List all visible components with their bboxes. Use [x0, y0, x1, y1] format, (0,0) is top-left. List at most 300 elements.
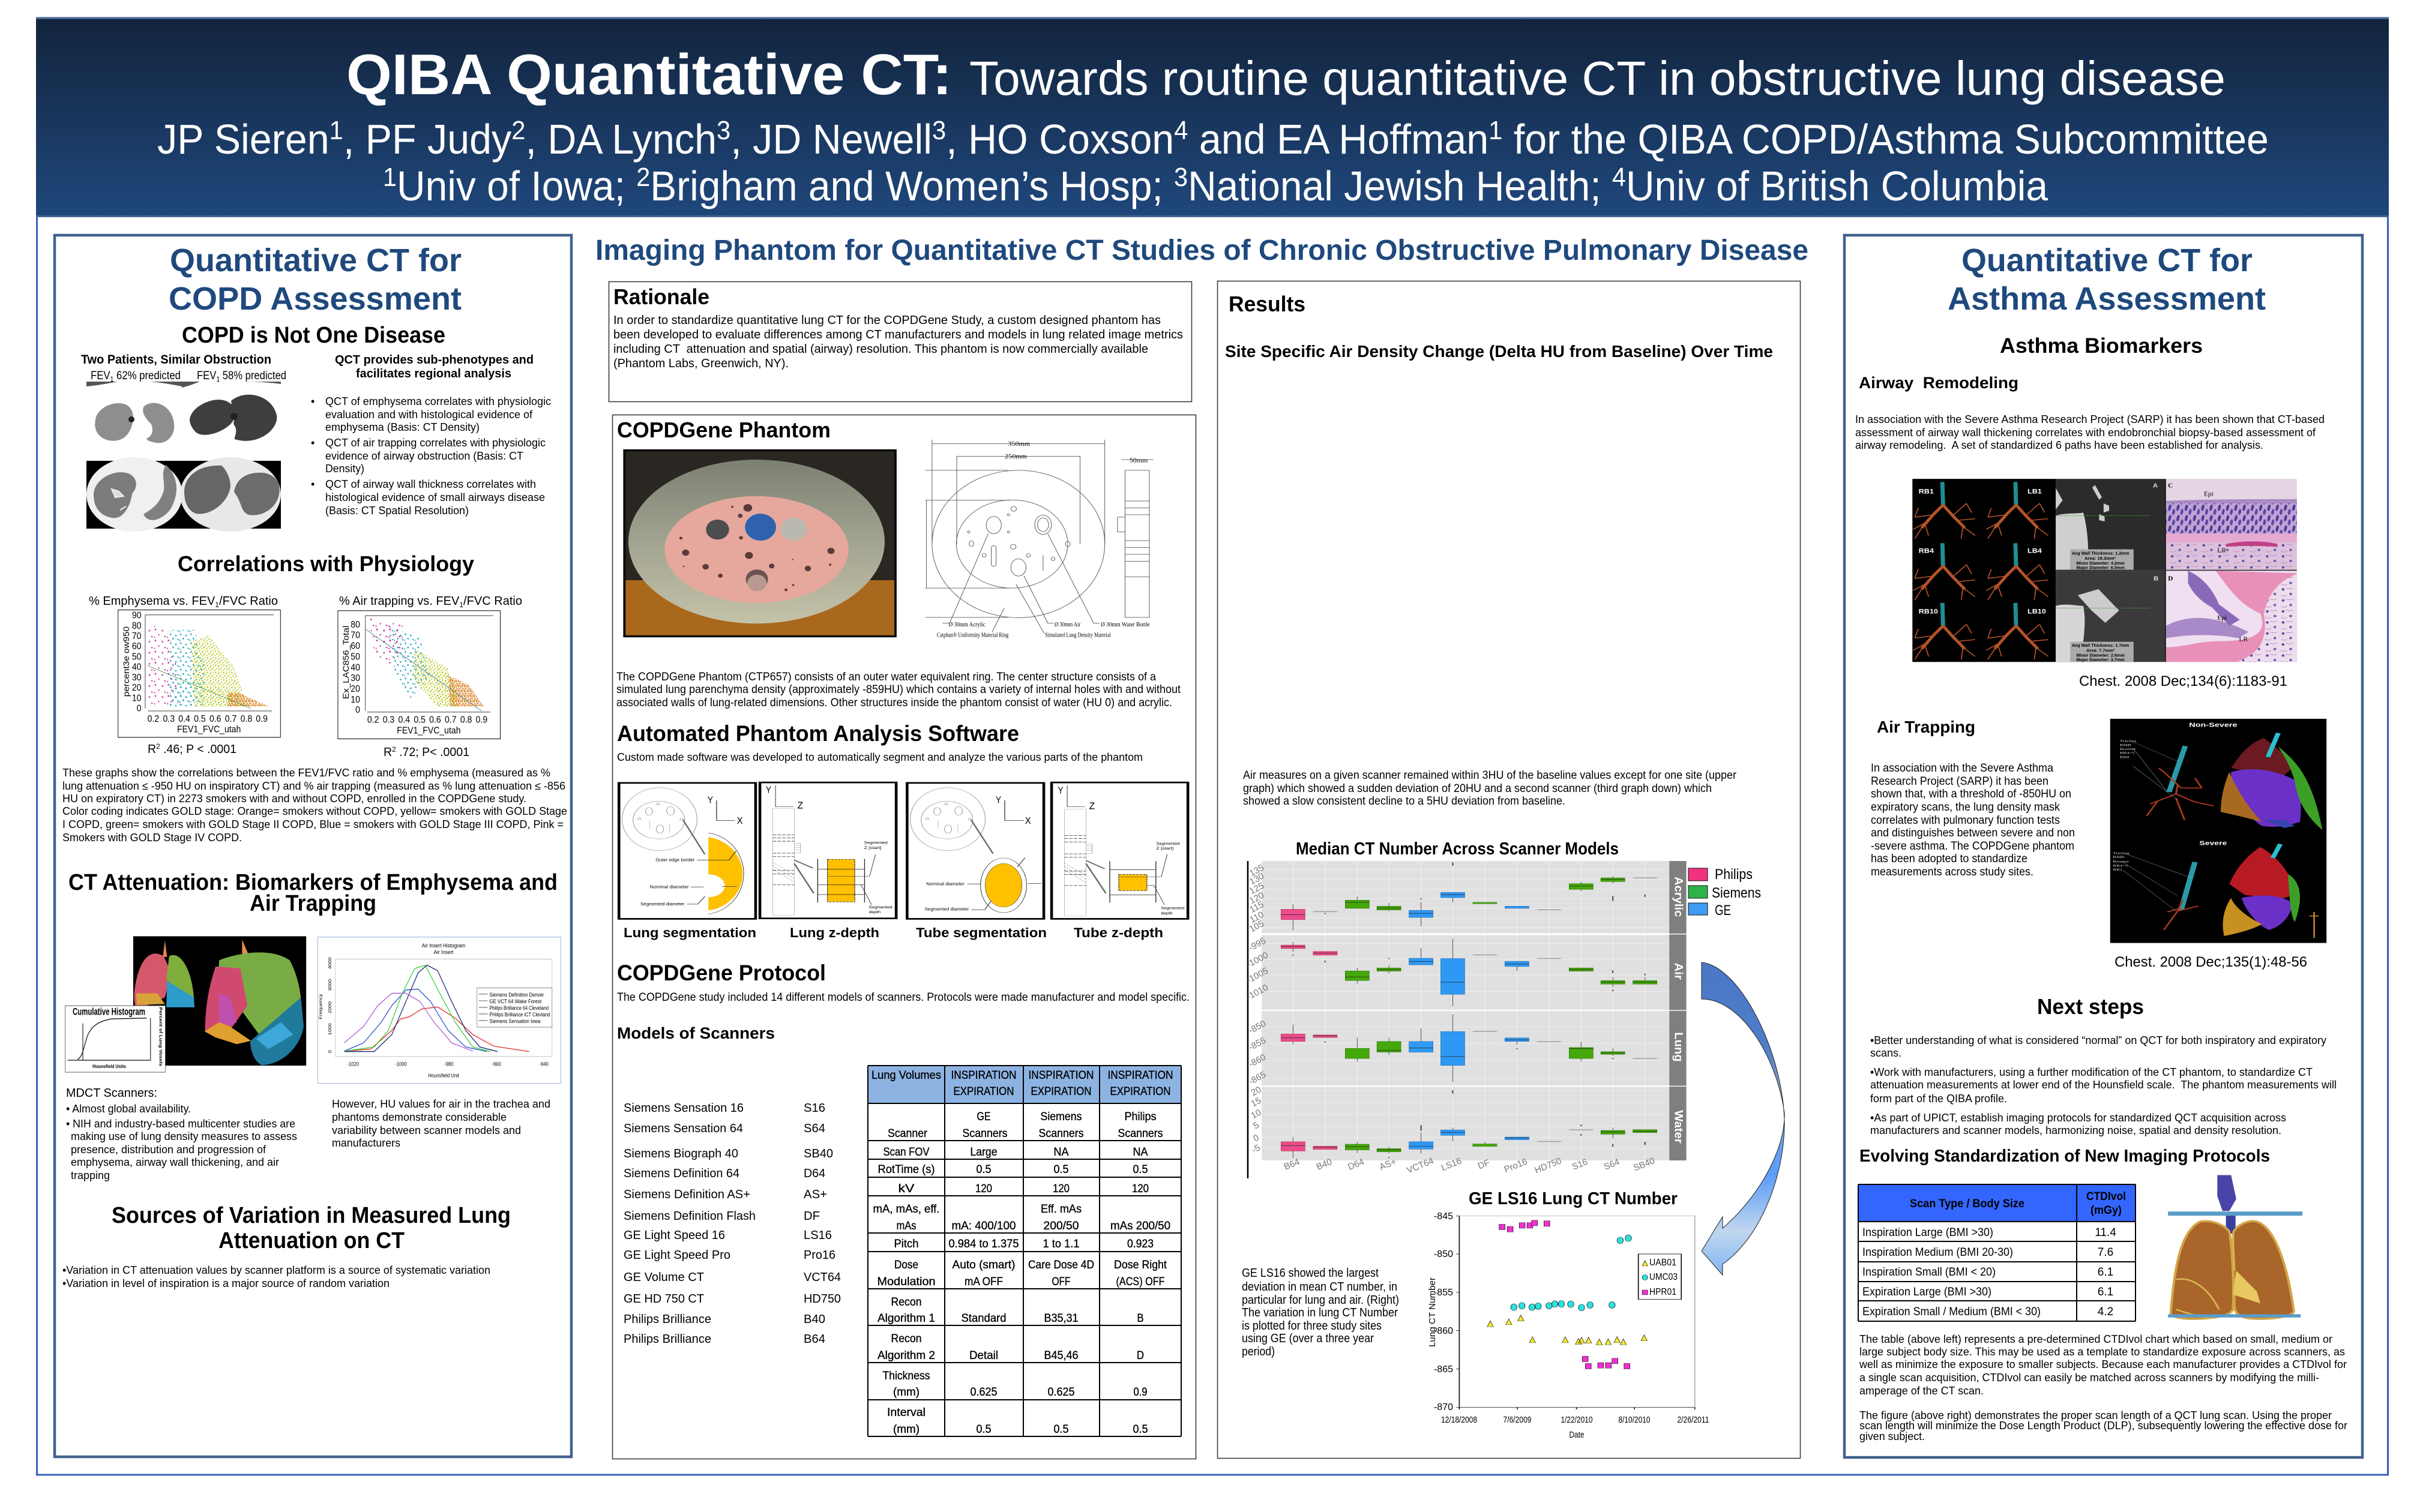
scatter chart: GE LS16 lung CT number: -850	[1434, 1249, 1453, 1259]
axis labels: box plot: -5	[1250, 1142, 1262, 1156]
subheading: site specific: Site Specific Air Density Change (Delta HU from Baseline) Over Time	[1225, 342, 1773, 361]
CT lung images	[86, 382, 281, 532]
diagram: phantom dimensions: 50mm	[1130, 457, 1148, 464]
text: software description: Custom made software was developed to automatically segment and analyze the various parts of the phantom	[617, 751, 1143, 763]
table: CTDIvol	[1858, 1184, 2136, 1321]
header band	[36, 17, 2389, 217]
stat: R2 .46: R	[148, 743, 156, 756]
table: protocol parameters: B45,46	[1044, 1349, 1078, 1362]
image labels: segmentation: Tube z-depth	[1074, 925, 1163, 940]
bullet list: QCT: •	[311, 395, 315, 407]
text: MDCT scanners: making use of lung density measures to assess	[71, 1130, 297, 1142]
authors: 2	[511, 116, 525, 145]
scatter chart: air trapping vs FEV1/FVC: 0.4	[399, 715, 410, 725]
image: airway trees, CT and histology: Minor Diameter: 2.6mm	[2077, 653, 2125, 658]
axis labels: box plot: 20	[1250, 1085, 1263, 1098]
axis labels: box plot: 135	[1248, 863, 1266, 878]
affiliations: 1	[383, 163, 397, 192]
text: air trapping: Research Project (SARP) it has been	[1871, 775, 2048, 788]
bullet list: QCT: evidence of airway obstruction (Basis: CT	[325, 450, 523, 462]
axis labels: box plot: D64	[1346, 1157, 1365, 1172]
scatter chart: GE LS16 lung CT number: Date	[1569, 1430, 1585, 1440]
diagram: phantom dimensions: Simulated Lung Density Material	[1045, 632, 1111, 638]
scatter chart: emphysema vs FEV1/FVC: 0.7	[225, 714, 236, 724]
text: next steps: attenuation measurements at lower end of the Hounsfield scale. The phantom measurements will	[1870, 1079, 2337, 1091]
table: protocol parameters: 0.984 to 1.375	[948, 1238, 1019, 1250]
image: airway trees, CT and histology	[1912, 479, 2297, 662]
legend: manufacturers	[1688, 866, 1761, 919]
diagram: lung segmentation	[619, 783, 756, 919]
whiskers	[1293, 876, 1645, 1158]
axis labels: box plot: -1010	[1245, 983, 1270, 1003]
image: lung scan length	[2168, 1175, 2302, 1319]
image: non-severe and severe lungs: Trachea	[2120, 739, 2137, 743]
image: airway trees, CT and histology: Major Diameter: 6.0mm	[2077, 565, 2125, 571]
table: CTDIvol: Scan Type / Body Size	[1910, 1198, 2024, 1210]
heading: Next steps: Next steps	[2037, 994, 2144, 1019]
table: protocol parameters: EXPIRATION	[1110, 1085, 1170, 1098]
text: table and figure notes: well as minimize the exposure to smaller subjects. Because each manufacturer provides a CTDIvol for	[1859, 1358, 2347, 1370]
table: CTDIvol: Inspiration Medium (BMI 20-30)	[1862, 1246, 2013, 1259]
text: GE LS16 description: period)	[1242, 1345, 1275, 1358]
diagram: lung z-depth: depth	[869, 910, 880, 914]
text: next steps: scans.	[1870, 1047, 1901, 1059]
axis labels: box plot: 120	[1248, 890, 1266, 906]
heading: Quantitative CT for COPD Assessment: COPD Assessment	[169, 281, 462, 317]
scatter chart: air trapping vs FEV1/FVC: Ex_LAC856_Total	[342, 626, 351, 699]
chart title: emphysema: 1	[215, 601, 219, 609]
diagram: lung z-depth: Y	[766, 785, 771, 795]
subheading: Air Trapping: Air Trapping	[1877, 718, 1975, 736]
heading: CT Attenuation: CT Attenuation: Biomarkers of Emphysema and	[68, 870, 558, 895]
axis labels: box plot: 15	[1250, 1096, 1263, 1109]
text: HU values variability: manufacturers	[332, 1137, 400, 1149]
text: air trapping: has been adopted to standardize	[1871, 853, 2027, 865]
table: protocol parameters: mAs 200/50	[1110, 1220, 1170, 1232]
list: scanner models: D64	[804, 1167, 825, 1180]
chart: air insert histogram: -940	[540, 1061, 549, 1067]
table: protocol parameters: 0.5	[1133, 1423, 1148, 1436]
table: protocol parameters: INSPIRATION	[1029, 1069, 1094, 1082]
box plot: median CT number by scanner: Water	[1672, 1110, 1685, 1144]
scatter chart: emphysema vs FEV1/FVC: 70	[132, 632, 141, 641]
scatter chart: air trapping vs FEV1/FVC: 10	[351, 695, 360, 705]
title: QIBA Quantitative CT:	[346, 43, 952, 107]
text: rationale body: been developed to evaluate differences among CT manufacturers and models in lung related image metrics	[613, 328, 1183, 341]
text: airway remodeling: In association with the Severe Asthma Research Project (SARP) it has been shown that CT-based	[1855, 413, 2325, 425]
bullet list: QCT: evaluation and with histological evidence of	[325, 409, 533, 421]
text: rationale body: In order to standardize quantitative lung CT for the COPDGene Study, a custom designed phantom has	[613, 314, 1161, 327]
image: airway trees, CT and histology: Area: 7.7mm²	[2086, 648, 2115, 653]
diagram: lung z-depth: Z	[798, 800, 803, 811]
axis labels: box plot: B64	[1283, 1157, 1301, 1172]
text: GE LS16 description: The variation in lung CT Number	[1242, 1306, 1398, 1319]
heading: COPD is Not One Disease: COPD is Not One Disease	[182, 323, 445, 348]
table: protocol parameters: Thickness	[882, 1370, 930, 1382]
bullet list: QCT: histological evidence of small airways disease	[325, 491, 545, 503]
text: rationale body	[613, 314, 1183, 370]
scatter chart: emphysema vs FEV1/FVC: 20	[132, 683, 141, 693]
text: MDCT scanners: • NIH and industry-based multicenter studies are	[66, 1118, 295, 1130]
heading: Quantitative CT for Asthma Assessment	[1948, 242, 2266, 317]
table: protocol parameters: Recon	[891, 1333, 922, 1345]
label: FEV1 62%: 1	[110, 375, 114, 383]
axis labels: box plot: 0	[1251, 1133, 1261, 1144]
heading: Sources of Variation: Sources of Variation in Measured Lung	[112, 1203, 511, 1228]
list: scanner models: S64	[804, 1122, 825, 1135]
label: FEV1 62%: FEV	[91, 370, 113, 382]
box plot: median CT number by scanner: Air	[1672, 963, 1685, 980]
label: FEV1 58%: 1	[216, 375, 220, 383]
scatter chart: emphysema vs FEV1/FVC: 0.3	[163, 714, 175, 724]
stat: R2 .46: 2	[156, 742, 160, 751]
list: scanner models: Siemens Definition Flash	[624, 1210, 756, 1223]
image: airway trees, CT and histology: B	[2154, 575, 2159, 582]
diagram: lung z-depth: Z [start]	[864, 845, 881, 850]
heading: Correlations with Physiology: Correlations with Physiology	[178, 551, 474, 576]
list: scanner models	[624, 1102, 841, 1346]
scatter chart: emphysema vs FEV1/FVC: 80	[132, 621, 141, 631]
text: phantom description	[616, 671, 1181, 709]
scatter chart: emphysema vs FEV1/FVC: 0.9	[256, 714, 268, 724]
legend: manufacturers: GE	[1715, 902, 1731, 919]
stat: R2 .72: 2	[392, 745, 396, 754]
table: protocol parameters: Modulation	[877, 1276, 935, 1288]
image labels: segmentation: Tube segmentation	[916, 925, 1047, 940]
text: table and figure notes	[1859, 1333, 2347, 1442]
text: MDCT scanners	[66, 1087, 297, 1181]
image: non-severe and severe lungs: Bronint	[2120, 748, 2136, 751]
scatter chart: GE LS16 lung CT number: UMC03	[1649, 1272, 1678, 1282]
diagram: tube segmentation: Y	[996, 795, 1001, 805]
chart: air insert histogram: 4000	[327, 957, 333, 969]
image: non-severe and severe lungs: Bronint	[2113, 860, 2129, 863]
image: non-severe and severe lungs: RMB	[2120, 743, 2131, 747]
scatter chart: air trapping vs FEV1/FVC: 0.9	[476, 715, 487, 725]
text: graph description: Smokers with GOLD Stage IV COPD.	[62, 832, 242, 844]
scatter chart: emphysema vs FEV1/FVC	[118, 610, 280, 737]
list: scanner models: LS16	[804, 1229, 832, 1242]
table: protocol parameters: 0.5	[976, 1163, 992, 1176]
bullet list: QCT: QCT of airway wall thickness correlates with	[325, 478, 536, 490]
text: next steps: •Work with manufacturers, using a further modification of the CT phantom, to standardize CT	[1870, 1066, 2313, 1078]
image: airway trees, CT and histology: Epi	[2217, 614, 2227, 622]
scatter chart: emphysema vs FEV1/FVC: 0	[137, 704, 141, 714]
scatter chart: air trapping vs FEV1/FVC: 0.8	[460, 715, 472, 725]
list: scanner models: SB40	[804, 1147, 833, 1160]
diagram: lung z-depth: Segmented	[864, 841, 888, 845]
chart: air insert histogram: -960	[492, 1061, 501, 1067]
scatter chart: air trapping vs FEV1/FVC	[338, 611, 501, 739]
diagram: tube z-depth: Z [start]	[1156, 846, 1173, 851]
affiliations: 3	[1174, 163, 1188, 192]
text: rationale body: (Phantom Labs, Greenwich, NY).	[613, 357, 789, 370]
list: scanner models: VCT64	[804, 1271, 841, 1284]
diagram: tube segmentation: Nominal diameter	[926, 882, 965, 887]
list: scanner models: Siemens Sensation 16	[624, 1102, 744, 1115]
table: protocol parameters: Philips	[1125, 1111, 1156, 1123]
table: protocol parameters: 1 to 1.1	[1043, 1238, 1079, 1250]
panel: results	[1217, 281, 1801, 1458]
table: protocol parameters: EXPIRATION	[1031, 1085, 1091, 1098]
scatter chart: air trapping vs FEV1/FVC: 0.5	[414, 715, 426, 725]
scatter chart: air trapping vs FEV1/FVC: FEV1_FVC_utah	[397, 726, 461, 736]
table: protocol parameters: 0.625	[1048, 1386, 1074, 1399]
list: scanner models: DF	[804, 1210, 820, 1223]
chart: air insert histogram: -980	[444, 1061, 454, 1067]
heading: Quantitative CT for Asthma Assessment: Quantitative CT for	[1961, 242, 2253, 278]
text: MDCT scanners: • Almost global availability.	[66, 1103, 191, 1115]
scatter chart: emphysema vs FEV1/FVC: 30	[132, 673, 141, 683]
authors: 4	[1174, 116, 1188, 145]
text: graph description: HU on expiratory CT) in 2273 smokers with and without COPD, enrolled in the COPDGene study.	[62, 793, 526, 805]
scatter chart: GE LS16 lung CT number: -855	[1434, 1288, 1453, 1298]
authors: , PF Judy	[343, 116, 511, 163]
table: protocol parameters: 120	[1053, 1183, 1070, 1195]
heading: Asthma Biomarkers: Asthma Biomarkers	[2000, 334, 2203, 358]
text: air measures	[1243, 769, 1737, 808]
table: protocol parameters: Standard	[962, 1312, 1006, 1325]
image: airway trees, CT and histology: Epi	[2204, 491, 2214, 498]
text: table and figure notes: scan length will minimize the Dose Length Product (DLP), subsequently lowering the effective dose for	[1859, 1420, 2347, 1432]
list: scanner models: Philips Brilliance	[624, 1313, 711, 1326]
scatter chart: air trapping vs FEV1/FVC: 0.7	[445, 715, 457, 725]
table: protocol parameters: 120	[1132, 1183, 1149, 1195]
text: QCT provides sub-phenotypes	[335, 353, 534, 380]
image: 3D lung lobes	[133, 936, 306, 1066]
text: air trapping	[1871, 762, 2075, 878]
text: HU values variability	[332, 1098, 550, 1149]
table: protocol parameters: B35,31	[1044, 1312, 1078, 1325]
authors: JP Sieren	[157, 116, 339, 163]
diagram: tube segmentation: X	[1025, 815, 1031, 826]
box plot: median CT number by scanner: Lung	[1672, 1032, 1685, 1062]
table: protocol parameters: INSPIRATION	[1108, 1069, 1173, 1082]
table: protocol parameters: NA	[1054, 1146, 1069, 1159]
table: protocol parameters: Recon	[891, 1296, 922, 1309]
text: MDCT scanners: emphysema, airway wall thickening, and air	[71, 1156, 279, 1168]
list: scanner models: GE Light Speed Pro	[624, 1249, 730, 1262]
text: phantom description: simulated lung parenchyma density (approximately -859HU) which contains a variety of internal holes with and without	[616, 683, 1181, 696]
inset: cumulative histogram: Percent of Lung Voxels	[158, 1007, 164, 1066]
authors: and EA Hoffman	[1188, 116, 1488, 163]
scatter chart: GE LS16 lung CT number: UAB01	[1649, 1258, 1676, 1268]
text: HU values variability: However, HU values for air in the trachea and	[332, 1098, 550, 1110]
chart: air insert histogram: Siemens Definition Denver	[489, 991, 544, 998]
table: protocol parameters: (mm)	[893, 1386, 920, 1399]
diagram: tube segmentation	[907, 783, 1044, 919]
heading: Automated Phantom Analysis Software: Automated Phantom Analysis Software	[617, 721, 1019, 746]
text: air measures: showed a slow consistent decline to a 5HU deviation from baseline.	[1243, 795, 1565, 808]
scatter chart: emphysema vs FEV1/FVC: 90	[132, 611, 141, 621]
scatter chart: air trapping vs FEV1/FVC: 0.3	[383, 715, 394, 725]
axis labels: box plot: -1000	[1245, 950, 1270, 970]
table: CTDIvol: 6.1	[2098, 1286, 2113, 1298]
scatter chart: GE LS16 lung CT number: Lung CT Number	[1427, 1277, 1437, 1347]
table: protocol parameters: kV	[898, 1183, 915, 1195]
text: GE LS16 description: using GE (over a three year	[1242, 1332, 1374, 1345]
image: airway trees, CT and histology: LR	[2239, 636, 2248, 643]
table: protocol parameters: Scan FOV	[883, 1146, 930, 1159]
table: protocol parameters: GE	[977, 1111, 990, 1123]
image: non-severe and severe lungs: RMB	[2113, 856, 2125, 859]
text: next steps: •As part of UPICT, establish imaging protocols for standardized QCT acquisition across	[1870, 1112, 2286, 1124]
box plot: median CT number by scanner: Acrylic	[1672, 877, 1685, 917]
table: protocol parameters: D	[1137, 1349, 1144, 1362]
table: protocol parameters: Scanners	[963, 1127, 1007, 1140]
scatter chart: air trapping vs FEV1/FVC: 0.6	[429, 715, 441, 725]
table: protocol parameters: 0.5	[1054, 1423, 1068, 1436]
diagram: tube z-depth: Z	[1089, 801, 1095, 811]
subheading: Airway Remodeling: Airway Remodeling	[1859, 374, 2018, 392]
scatter chart: emphysema vs FEV1/FVC: 0.6	[209, 714, 221, 724]
image: airway trees, CT and histology: RB4	[1919, 547, 1934, 554]
table: protocol parameters: Algorithm 1	[877, 1312, 935, 1325]
image: non-severe and severe lungs: Non-Severe	[2189, 721, 2238, 728]
text: GE LS16 description	[1242, 1267, 1399, 1358]
bullet list: QCT: •	[311, 437, 315, 449]
table: protocol parameters: 120	[975, 1183, 992, 1195]
chart: air insert histogram: Hounsfield Unit	[428, 1072, 459, 1078]
text: phantom description: associated walls of lung-related dimensions. Other structures inside the phantom consist of water (HU 0) and acrylic.	[616, 697, 1172, 709]
heading: Sources of Variation: Attenuation on CT	[218, 1228, 405, 1253]
axis labels: box plot: 105	[1248, 919, 1266, 934]
scatter chart: GE LS16 lung CT number: -845	[1434, 1211, 1453, 1222]
list: scanner models: GE Light Speed 16	[624, 1229, 725, 1242]
list: scanner models: Philips Brilliance	[624, 1333, 711, 1346]
outliers	[1293, 862, 1645, 1158]
text: table and figure notes: The table (above left) represents a pre-determined CTDIvol chart which based on small, medium or	[1859, 1333, 2332, 1345]
axis labels: box plot	[1245, 863, 1657, 1175]
scatter chart: emphysema vs FEV1/FVC: 10	[132, 694, 141, 703]
table: protocol parameters: Auto (smart)	[952, 1259, 1016, 1271]
scatter chart: emphysema vs FEV1/FVC: 0.8	[241, 714, 252, 724]
diagram: lung z-depth: Segmented	[869, 905, 892, 909]
chart: air insert histogram: -1020	[347, 1061, 359, 1067]
diagram: phantom dimensions: 250mm	[1005, 453, 1027, 460]
diagram: tube z-depth: depth	[1161, 911, 1173, 915]
table: protocol parameters: mA, mAs, eff.	[873, 1203, 940, 1216]
heading: COPDGene Phantom: COPDGene Phantom	[617, 418, 831, 442]
text: air trapping: expiratory scans, the lung density mask	[1871, 801, 2060, 814]
text: air trapping: In association with the Severe Asthma	[1871, 762, 2053, 775]
heading: two patients: Two Patients, Similar Obstruction	[81, 353, 271, 367]
scatter chart: GE LS16 lung CT number: -865	[1434, 1364, 1453, 1375]
table: protocol parameters: (mm)	[893, 1423, 920, 1436]
inset: cumulative histogram: Hounsfield Units	[92, 1064, 126, 1069]
image: airway trees, CT and histology: Area: 19.3mm²	[2084, 556, 2116, 561]
affiliations: Brigham and Women’s Hosp;	[650, 163, 1174, 209]
text: phantom description: The COPDGene Phantom (CTP657) consists of an outer water equivalent ring. The center structure consists of a	[616, 671, 1156, 683]
scatter chart: air trapping vs FEV1/FVC: 30	[351, 674, 360, 683]
scatter chart: emphysema vs FEV1/FVC: 0.2	[148, 714, 159, 724]
image: airway trees, CT and histology: Minor Diameter: 4.2mm	[2077, 560, 2125, 566]
chart: air insert histogram: Frequency	[318, 994, 323, 1019]
heading: CT Attenuation	[68, 870, 558, 916]
text: sources of variation bullets	[62, 1264, 490, 1289]
axis labels: box plot: 5	[1251, 1120, 1261, 1131]
heading: Evolving Standardization: Evolving Standardization of New Imaging Protocols	[1859, 1147, 2270, 1166]
scatter chart: GE LS16 lung CT number: 12/18/2008	[1441, 1415, 1477, 1425]
chart: air insert histogram: 1000	[327, 1023, 333, 1035]
chart: air insert histogram: Air Insert	[434, 949, 454, 955]
scatter chart: emphysema vs FEV1/FVC: percent3e ow950	[122, 626, 131, 697]
panel: COPD assessment	[55, 235, 571, 1457]
medians and single-value lines	[1281, 880, 1657, 1150]
text: graph description: I COPD, green= smokers with GOLD Stage II COPD, Blue = smokers with GOLD Stage III COPD, Pink =	[62, 818, 564, 830]
text: air trapping: shown that, with a threshold of -850HU on	[1871, 788, 2071, 800]
axis labels: box plot: 110	[1248, 910, 1265, 925]
axis labels: box plot: -995	[1247, 935, 1268, 953]
axis labels: box plot: S16	[1571, 1157, 1589, 1172]
table: protocol parameters: Dose Right	[1114, 1259, 1167, 1271]
text: air measures: graph) which showed a sudden deviation of 20HU and a second scanner (third graph down) which	[1243, 782, 1712, 795]
text: air trapping: correlates with pulmonary function tests	[1871, 814, 2060, 827]
list: scanner models: Siemens Definition AS+	[624, 1188, 750, 1201]
text: table and figure notes: given subject.	[1859, 1430, 1925, 1442]
list: scanner models: S16	[804, 1102, 825, 1115]
affiliations: National Jewish Health;	[1188, 163, 1612, 209]
heading: Quantitative CT for COPD Assessment: Quantitative CT for	[170, 242, 462, 278]
affiliations: Univ of British Columbia	[1626, 163, 2048, 209]
table: protocol parameters: Pitch	[894, 1238, 918, 1250]
image: non-severe and severe lungs: RB1	[2113, 868, 2123, 871]
table: protocol parameters: Eff. mAs	[1041, 1203, 1082, 1216]
table: protocol parameters: 0.5	[1054, 1163, 1068, 1176]
authors: 1	[330, 116, 343, 145]
text: air trapping: and distinguishes between severe and non	[1871, 827, 2075, 839]
chart title: GE LS16: GE LS16 Lung CT Number	[1469, 1189, 1678, 1208]
text: airway remodeling	[1855, 413, 2325, 451]
heading: Rationale: Rationale	[613, 284, 709, 309]
list: scanner models: B64	[804, 1333, 825, 1346]
table: protocol parameters: B	[1137, 1312, 1144, 1325]
chart title: air trapping: % Air trapping vs. FEV	[339, 595, 459, 608]
table: protocol parameters: mAs	[897, 1220, 916, 1232]
table: protocol parameters: mA OFF	[965, 1276, 1003, 1288]
text: protocol: The COPDGene study included 14 different models of scanners. Protocols were made manufacturer and model specific.	[617, 991, 1190, 1004]
text: GE LS16 description: is plotted for three study sites	[1242, 1319, 1382, 1333]
image labels: segmentation: Lung z-depth	[790, 925, 879, 940]
chart: air insert histogram: Air Insert Histogram	[422, 942, 465, 949]
table: protocol parameters: Scanners	[1118, 1127, 1163, 1140]
table: CTDIvol: Inspiration Small (BMI < 20)	[1862, 1266, 1996, 1279]
list: scanner models: Pro16	[804, 1249, 835, 1262]
diagram: phantom dimensions: Ø 30mm Acrylic	[949, 622, 986, 628]
list: scanner models: Siemens Definition 64	[624, 1167, 739, 1180]
diagram: lung segmentation: Y	[708, 795, 713, 805]
image: non-severe and severe lungs: RB4+5	[2113, 864, 2128, 868]
image: non-severe and severe lungs	[2110, 719, 2326, 943]
scatter chart: emphysema vs FEV1/FVC: 0.4	[178, 714, 190, 724]
table: CTDIvol: Expiration Small / Medium (BMI < 30)	[1862, 1306, 2041, 1318]
image: airway trees, CT and histology: C	[2168, 482, 2173, 489]
image: airway trees, CT and histology: RB1	[1919, 487, 1934, 495]
scatter chart: emphysema vs FEV1/FVC: 40	[132, 662, 141, 673]
table: CTDIvol: 6.1	[2098, 1266, 2113, 1279]
chart: air insert histogram: Siemens Sensation Iowa	[489, 1018, 541, 1024]
heading: Models of Scanners: Models of Scanners	[617, 1024, 775, 1042]
text: GE LS16 description: deviation in mean CT number, in	[1242, 1280, 1397, 1294]
panel: COPDGene phantom and protocol	[612, 415, 1196, 1459]
diagram: phantom dimensions: Ø 30mm Air	[1055, 622, 1080, 628]
axis labels: box plot: HD750	[1533, 1156, 1563, 1175]
table: protocol parameters: Care Dose 4D	[1028, 1259, 1094, 1271]
list: scanner models: B40	[804, 1313, 825, 1326]
axis labels: box plot: LS16	[1440, 1156, 1463, 1173]
image: airway trees, CT and histology: LR	[2217, 547, 2227, 554]
axis labels: box plot: 10	[1250, 1108, 1263, 1121]
